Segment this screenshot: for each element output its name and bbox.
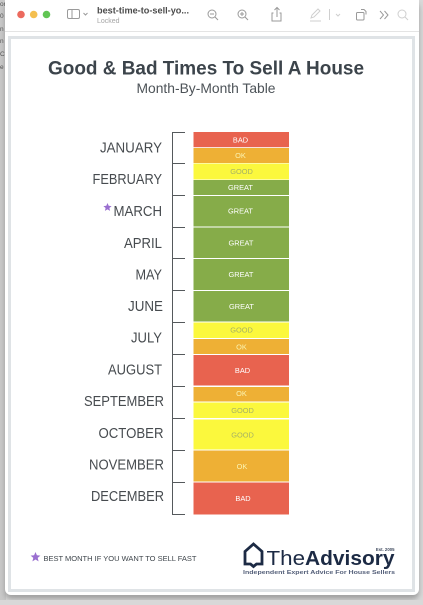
background window text fragments: n [0, 26, 4, 33]
month labels: APRIL [124, 236, 162, 252]
background window text fragments: or [0, 1, 7, 8]
month labels: NOVEMBER [89, 458, 164, 474]
background window text fragments [0, 1, 7, 71]
window controls [17, 11, 50, 18]
month labels: DECEMBER [91, 489, 164, 505]
legend: BEST MONTH IF YOU WANT TO SELL FAST [44, 554, 197, 563]
month labels: SEPTEMBER [84, 394, 164, 410]
logo: The Advisory: Independent Expert Advice For House Sellers [243, 570, 396, 576]
bar segments [194, 132, 289, 514]
bar labels: GREAT [228, 206, 253, 216]
bar labels: GREAT [229, 302, 254, 311]
icon: march star [103, 203, 112, 211]
month labels [84, 140, 164, 505]
bar labels: GREAT [229, 238, 254, 248]
bar labels: GREAT [229, 270, 254, 279]
month labels: MAY [136, 268, 162, 284]
document name: best-time-to-sell-yo... [97, 6, 189, 16]
month labels: FEBRUARY [92, 172, 162, 188]
icon: house [245, 544, 262, 566]
bar labels: OK [235, 151, 246, 160]
logo: The Advisory: Advisory [305, 547, 395, 570]
bar labels: GOOD [230, 326, 253, 334]
logo: The Advisory [243, 544, 396, 576]
bar labels: BAD [233, 136, 248, 144]
toolbar icons [68, 8, 408, 21]
background window text fragments: n [0, 38, 4, 45]
month labels: OCTOBER [98, 426, 164, 442]
bar labels: OK [236, 389, 247, 398]
month labels: MARCH [114, 204, 162, 220]
bar labels: BAD [235, 366, 250, 375]
month labels: JUNE [128, 299, 163, 315]
background window text fragments: C [0, 51, 5, 58]
bar labels: GREAT [228, 183, 253, 192]
month labels: AUGUST [108, 362, 162, 378]
month labels: JULY [131, 330, 162, 346]
bar labels [228, 136, 254, 503]
month bracket [172, 132, 185, 514]
logo: The Advisory: The [266, 547, 305, 570]
bar labels: OK [236, 342, 247, 352]
bar labels: OK [237, 462, 247, 471]
document name: Locked [97, 18, 120, 25]
month labels: JANUARY [100, 140, 162, 156]
title: Good & Bad Times To Sell A House [48, 58, 364, 80]
bar labels: BAD [235, 494, 251, 503]
document name [97, 6, 189, 25]
background window text fragments: e [0, 64, 4, 71]
logo: The Advisory: Est. 2005 [376, 547, 395, 552]
bar labels: GOOD [230, 167, 253, 176]
bar labels: GOOD [231, 406, 254, 415]
subtitle: Month-By-Month Table [136, 80, 276, 96]
bar labels: GOOD [231, 430, 254, 440]
background window text fragments: 0 [0, 13, 4, 20]
